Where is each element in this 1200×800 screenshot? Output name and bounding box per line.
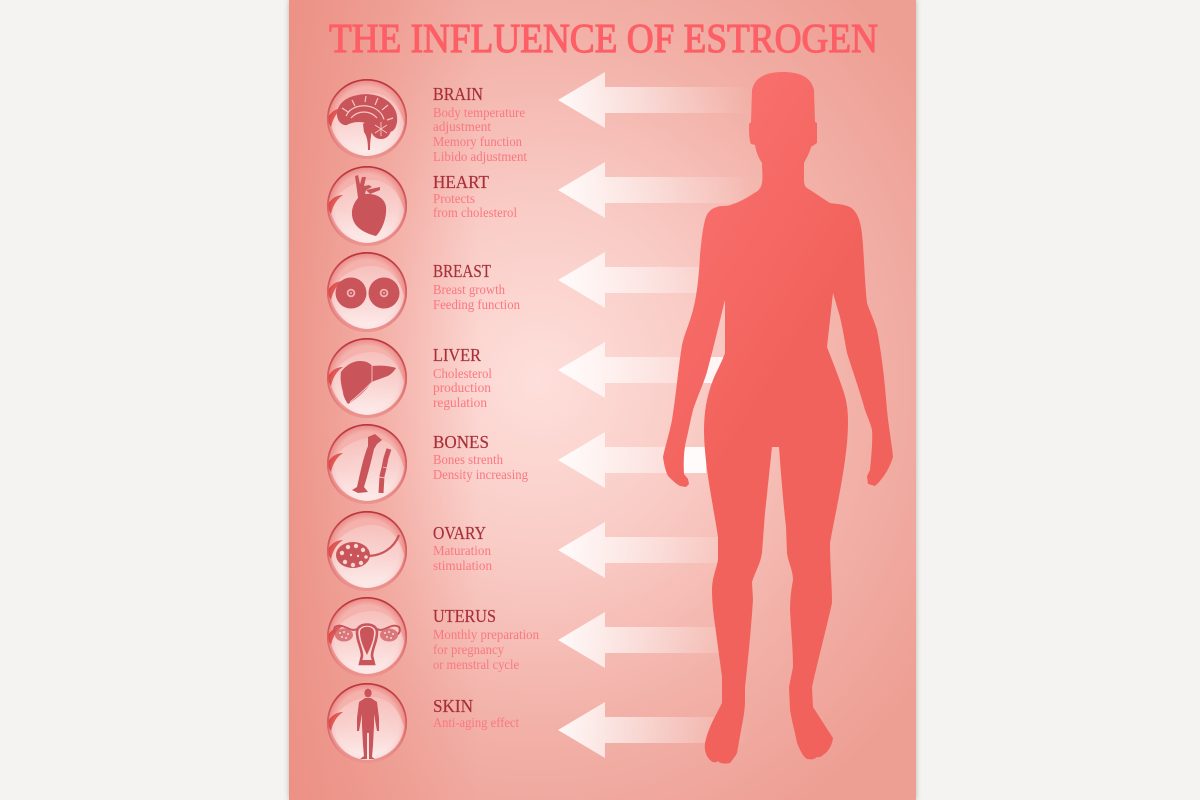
arrow: liver <box>558 342 750 398</box>
text: brain: adjustment <box>433 119 491 134</box>
text: bones <box>433 432 528 482</box>
item: liver <box>327 338 492 418</box>
text: uterus: or menstral cycle <box>433 657 519 672</box>
arrow: bones <box>558 432 750 488</box>
title: THE INFLUENCE OF ESTROGEN <box>329 15 878 61</box>
text: breast <box>433 261 520 312</box>
sphere icon: heart <box>327 166 407 246</box>
text: uterus: for pregnancy <box>433 642 504 657</box>
sphere icon: brain <box>327 79 407 159</box>
sphere icon: skin <box>327 683 407 763</box>
text: bones: Bones strenth <box>433 452 503 467</box>
sphere icon: uterus <box>327 597 407 677</box>
text: liver <box>433 345 492 410</box>
text: brain: Body temperature <box>433 105 525 120</box>
text: liver: regulation <box>433 395 487 410</box>
body silhouette <box>663 72 893 764</box>
text: heart <box>433 172 517 220</box>
panel: poster background <box>289 0 916 800</box>
item: uterus <box>327 597 539 677</box>
sphere icon: liver <box>327 338 407 418</box>
text: ovary: stimulation <box>433 558 492 573</box>
text: brain: Memory function <box>433 134 522 149</box>
text: skin <box>433 696 519 730</box>
arrow: uterus <box>558 612 750 668</box>
text: heart: HEART <box>433 172 489 192</box>
text: heart: from cholesterol <box>433 205 517 220</box>
item: breast <box>327 252 520 332</box>
text: brain <box>433 84 527 164</box>
item: bones <box>327 424 528 504</box>
item: ovary <box>327 511 492 591</box>
text: uterus: UTERUS <box>433 606 496 626</box>
item: brain <box>327 79 527 164</box>
sphere icon: breast <box>327 252 407 332</box>
arrow: brain <box>558 72 750 128</box>
sphere icon: bones <box>327 424 407 504</box>
text: breast: Feeding function <box>433 297 520 312</box>
text: liver: production <box>433 380 491 395</box>
text: ovary: OVARY <box>433 523 486 543</box>
arrow: skin <box>558 702 750 758</box>
text: ovary: Maturation <box>433 543 491 558</box>
arrow: ovary <box>558 522 750 578</box>
text: breast: BREAST <box>433 261 491 281</box>
text: skin: Anti-aging effect <box>433 715 519 730</box>
text: uterus <box>433 606 539 672</box>
text: heart: Protects <box>433 191 475 206</box>
item: heart <box>327 166 517 246</box>
text: brain: Libido adjustment <box>433 149 527 164</box>
text: skin: SKIN <box>433 696 473 716</box>
text: brain: BRAIN <box>433 84 483 104</box>
text: bones: BONES <box>433 432 489 452</box>
arrow: heart <box>558 162 750 218</box>
text: ovary <box>433 523 492 573</box>
sphere icon: ovary <box>327 511 407 591</box>
item: skin <box>327 683 519 763</box>
text: breast: Breast growth <box>433 282 505 297</box>
text: liver: Cholesterol <box>433 366 492 381</box>
arrow: breast <box>558 252 750 308</box>
text: liver: LIVER <box>433 345 481 365</box>
text: uterus: Monthly preparation <box>433 627 539 642</box>
text: bones: Density increasing <box>433 467 528 482</box>
